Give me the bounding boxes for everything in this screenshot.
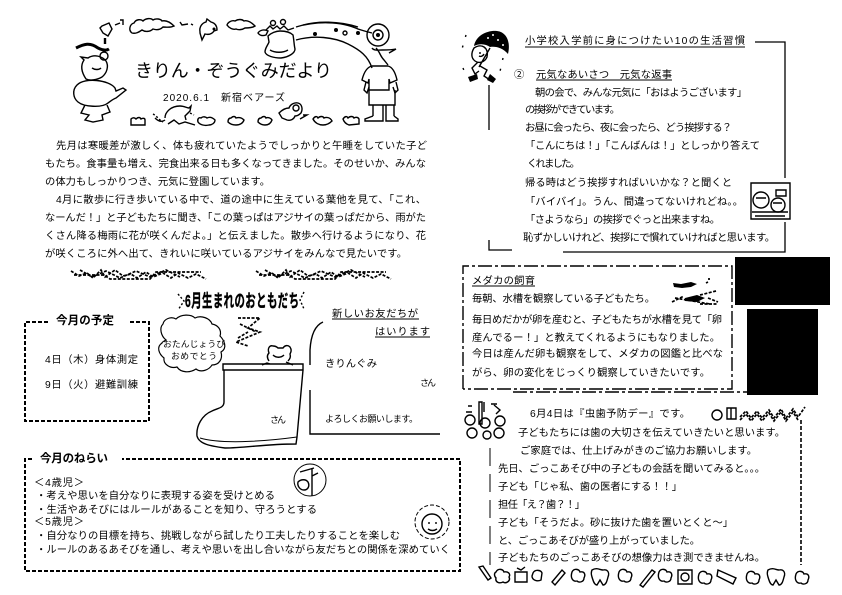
panel: tooth decay prevention day <box>465 392 809 587</box>
text block: monthly greeting: が咲くころに外へ出て、きれいに咲いているアジサイをみんなで見たいです。 <box>45 247 407 260</box>
text block: medaka story: 今日は産んだ卵も観察をして、メダカの図鑑と比べな <box>472 347 723 360</box>
panel: ten life habits <box>462 31 790 252</box>
text block: greetings story: 「さようなら」の挨拶でぐっと出来ますね。 <box>525 213 720 226</box>
text block: monthly greeting: 先月は寒暖差が激しく、体も疲れていたようでしっかりと午睡をしていた子ど <box>56 139 427 152</box>
heading: new friends: 新しいお友だちが <box>332 307 419 320</box>
decorative ornament strips <box>71 270 391 279</box>
ornament: tooth title strip <box>712 407 805 421</box>
text block: tooth story: 子どもたちには歯の大切さを伝えていきたいと思います。 <box>518 426 785 439</box>
text block: greetings story: くれました。 <box>527 158 580 170</box>
ornament: toothbrushes and teeth row <box>479 566 809 587</box>
text block: monthly greeting: なーんだ！」と子どもたちに聞き、「この葉っぱはアジサイの葉っぱだから、雨がた <box>45 211 426 224</box>
header illustration: animals, clouds and child <box>74 19 398 125</box>
icon: medaka fish <box>672 279 718 304</box>
heading: schedule: 今月の予定 <box>56 313 114 327</box>
text block: tooth story: ご家庭では、仕上げみがきのご協力お願いします。 <box>520 444 757 457</box>
aims text: ＜4歳児＞ <box>34 477 84 489</box>
icon: round child badge <box>294 464 326 496</box>
icon: small elephant with sparkles <box>153 106 195 125</box>
closing message: よろしくお願いします。 <box>325 414 418 424</box>
text block: medaka story: 毎朝、水槽を観察している子どもたち。 <box>472 292 655 305</box>
icon: children in picture frame <box>751 183 790 219</box>
text block: monthly greeting: の体力もしっかりつき、元気に登園しています。 <box>45 175 270 188</box>
date and class name: 2020.6.1 新宿ベアーズ <box>163 91 285 104</box>
aims text: ＜5歳児＞ <box>34 516 84 528</box>
cloud message: おたんじょうび <box>163 339 225 349</box>
text block: medaka story <box>472 292 723 379</box>
heading: June birthdays: 6月生まれのおともだち <box>185 291 299 312</box>
panel: new friends <box>310 307 440 434</box>
cloud message second line: おめでとう <box>171 351 217 361</box>
text block: greetings story: 「バイバイ」。うん、間違ってないけれどね。。 <box>525 195 743 208</box>
text block: tooth story <box>498 426 785 564</box>
icon: giraffe and long neck <box>258 20 372 68</box>
panel: ten life habits: 元気なあいさつ 元気な返事 <box>536 68 672 81</box>
text block: greetings story: 帰る時はどう挨拶すればいいかな？と聞くと <box>525 176 732 189</box>
text block: medaka story: がら、卵の変化をじっくり観察していきたいです。 <box>472 366 710 379</box>
text block: greetings story: お昼に会ったら、夜に会ったら、どう挨拶する？ <box>525 121 732 134</box>
aims text <box>34 477 450 556</box>
icon: frog <box>262 346 293 365</box>
heading: aims: 今月のねらい <box>40 451 108 465</box>
text block: greetings story: 恥ずかしいけれど、挨拶にで慣れていければと思います。 <box>523 231 775 244</box>
panel: birthday boot <box>159 315 303 448</box>
text block: greetings story: 「こんにちは！」「こんばんは！」としっかり答えて <box>525 139 760 152</box>
text block: tooth story: 先日、ごっこあそび中の子どもの会話を聞いてみると。。。 <box>498 462 765 475</box>
icon: small bird <box>180 19 217 40</box>
icon: mouse <box>279 103 307 120</box>
aims text: ・ルールのあるあそびを通し、考えや思いを出し合いながら友だちとの関係を深めていく <box>36 543 450 556</box>
text block: tooth story: 子ども「じゃ私、歯の医者にする！！」 <box>498 481 682 493</box>
aims text: ・考えや思いを自分なりに表現する姿を受けとめる <box>36 489 275 502</box>
subheading: greetings: ② <box>514 69 524 81</box>
icon: child holding giraffe <box>362 24 398 121</box>
panel: raising medaka <box>463 266 732 389</box>
icon: lower row clouds <box>131 116 359 125</box>
text block: medaka story: 毎日めだかが卵を産むと、子どもたちが水槽を見て「卵 <box>472 313 722 326</box>
sparkle ornament <box>236 318 260 346</box>
text block: tooth story: 担任「え？歯？！」 <box>498 498 585 511</box>
heading line two: はいります <box>375 326 430 338</box>
boot name label: さん <box>270 415 286 425</box>
text block: greetings story <box>523 86 775 244</box>
schedule entry: measurement: 4日（木）身体測定 <box>45 353 138 366</box>
text block: greetings story: 朝の会で、みんな元気に「おはようございます」 <box>535 86 747 99</box>
icon: clouds in the sky <box>130 19 255 33</box>
text block: monthly greeting: くさん降る梅雨に花が咲くんだよ。」と伝えました。散歩へ行けるようになり、花 <box>45 229 426 242</box>
text block: tooth story: と、ごっこあそびが盛り上がっていました。 <box>498 534 700 547</box>
heading: tooth day: 6月4日は『虫歯予防デー』です。 <box>530 407 690 420</box>
aims text: ・自分なりの目標を持ち、挑戦しながら試したり工夫したりすることを楽しむ <box>36 529 400 542</box>
text block: monthly greeting <box>45 139 427 260</box>
text block: monthly greeting: 4月に散歩に行き歩いている中で、道の途中に生えている葉他を見て、「これ、 <box>56 193 426 206</box>
aims text: ・生活やあそびにはルールがあることを知り、守ろうとする <box>36 503 317 516</box>
icon: rain boot <box>197 364 303 448</box>
redacted black block upper <box>735 257 830 305</box>
text block: monthly greeting: もたち。食事量も増え、完食出来る日も多くなってきました。そのせいか、みんな <box>45 157 426 170</box>
icon: tooth characters <box>465 402 505 439</box>
text block: greetings story: の挨拶ができています。 <box>525 103 620 116</box>
icon: elephant carrying bird <box>74 20 126 122</box>
text block: tooth story: 子ども「そうだよ。砂に抜けた歯を置いとくと～」 <box>498 516 733 529</box>
class name: きりんぐみ <box>325 358 377 370</box>
heading: medaka: メダカの飼育 <box>472 274 535 287</box>
schedule entry: drill: 9日（火）避難訓練 <box>45 378 139 391</box>
heading: habits: 小学校入学前に身につけたい10の生活習慣 <box>525 34 745 47</box>
icon: child with umbrella <box>462 31 509 83</box>
panel: this month's schedule <box>25 313 149 421</box>
text block: tooth story: 子どもたちのごっこあそびの想像力はき測できませんね。 <box>498 551 765 564</box>
panel: this month's aims <box>25 451 460 571</box>
title: きりん・ぞうぐみだより <box>135 61 332 81</box>
icon: round face badge <box>415 505 449 539</box>
redacted black block lower <box>747 309 818 395</box>
text block: medaka story: 産んでるー！」と教えてくれるようにもなりました。 <box>472 331 720 344</box>
name placeholder: さん <box>420 378 436 388</box>
speech cloud <box>159 315 225 372</box>
